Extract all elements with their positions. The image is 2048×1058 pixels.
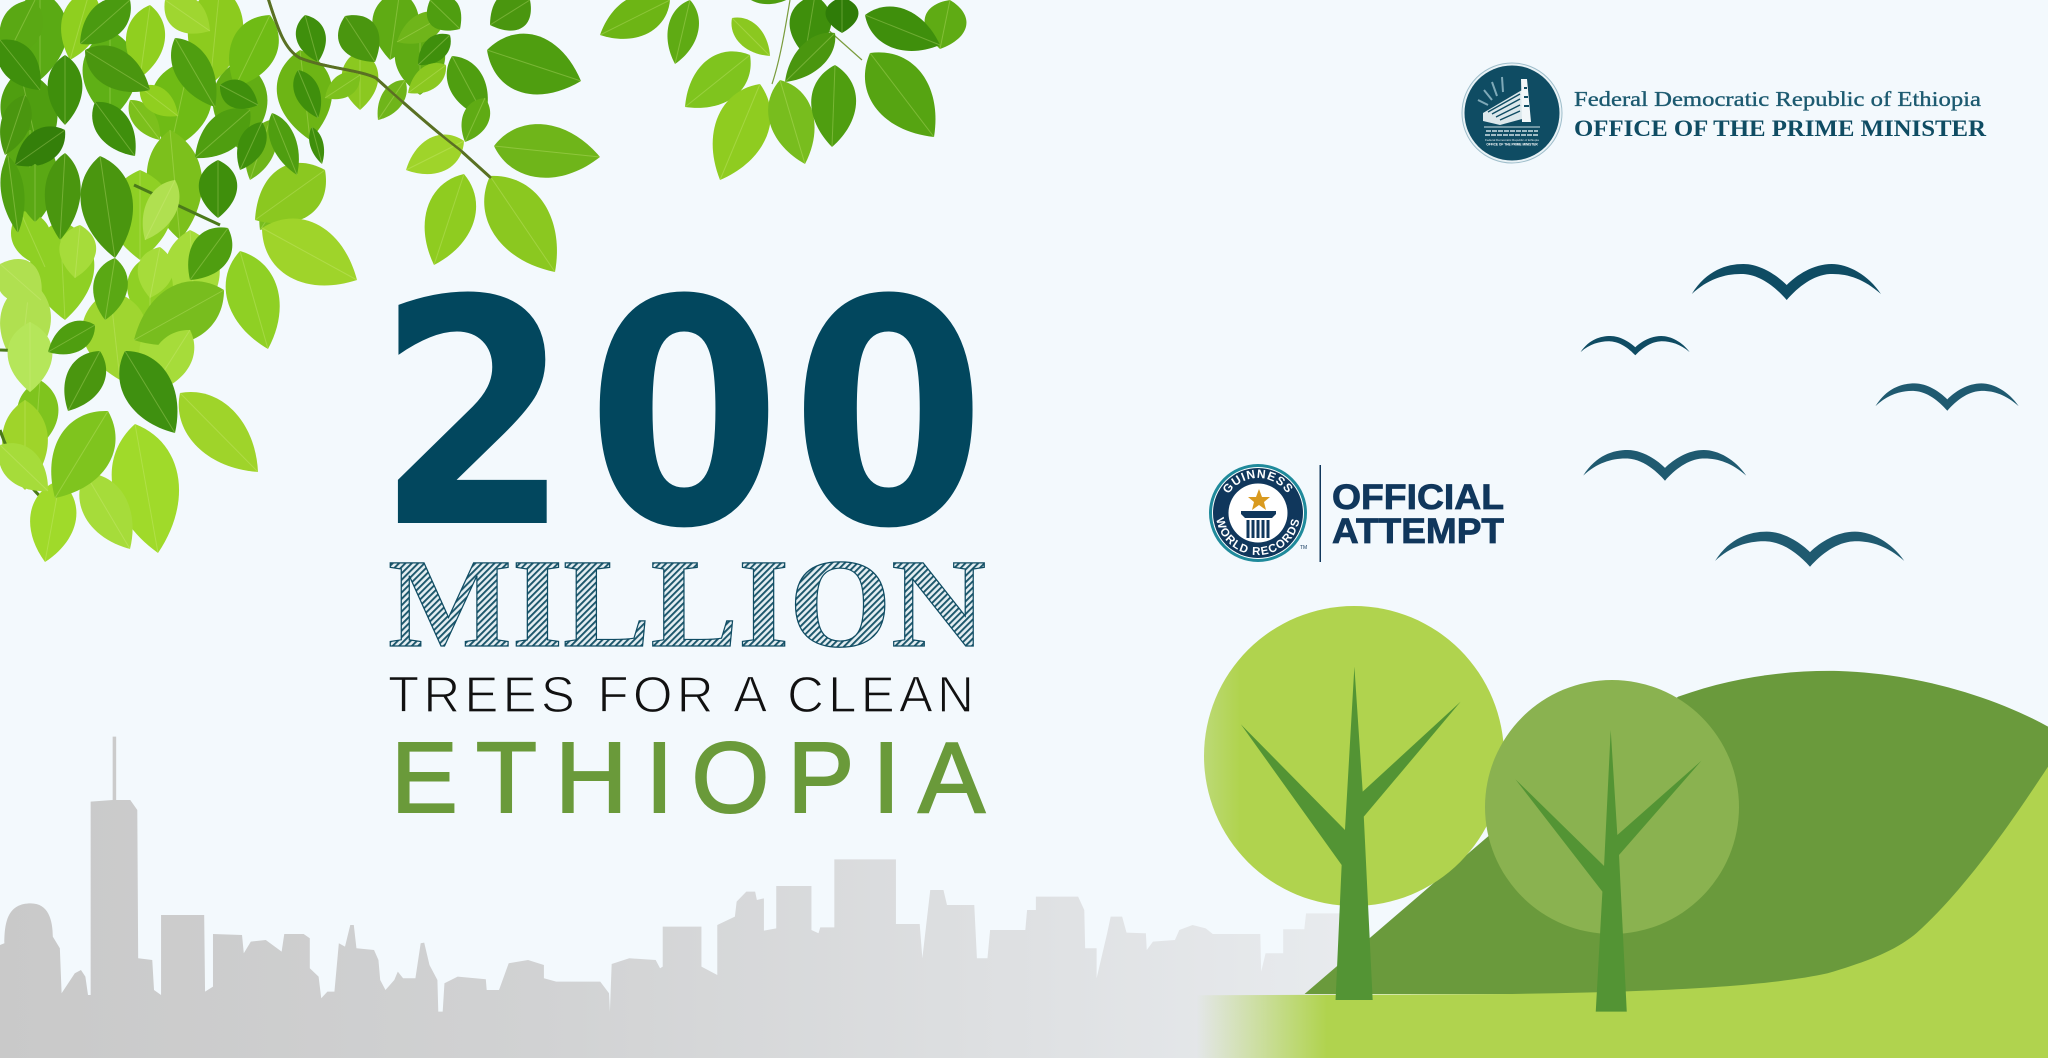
- logo: Guinness World Records badge: [1209, 464, 1307, 562]
- divider: [1320, 465, 1321, 562]
- logo: Office of the Prime Minister seal: [1462, 63, 1562, 163]
- text: Ethiopia: ETHIOPIA: [391, 722, 985, 834]
- logo: Office of the Prime Minister seal: OFFICE OF THE PRIME MINISTER: [1486, 142, 1538, 146]
- logo: Guinness World Records badge: GUINNESS: [1224, 470, 1292, 492]
- text: Office of the Prime Minister: OFFICE OF THE PRIME MINISTER: [1574, 116, 1986, 141]
- foliage: top-left branch: [0, 0, 603, 566]
- text: official attempt: ATTEMPT: [1332, 512, 1504, 551]
- city skyline silhouette: [0, 737, 1347, 1058]
- heading: 200: 200: [376, 233, 986, 597]
- logo: Guinness World Records badge: TM: [1300, 545, 1307, 551]
- logo: Guinness World Records badge: WORLD RECORDS: [1216, 516, 1299, 556]
- text: Federal Democratic Republic of Ethiopia: Federal Democratic Republic of Ethiopia: [1574, 87, 1982, 111]
- text: official attempt: OFFICIAL: [1332, 478, 1504, 517]
- foliage: top-centre branch: [591, 0, 971, 190]
- hill: [1305, 671, 2048, 995]
- birds: [1581, 264, 2019, 567]
- tree: left: [1204, 606, 1504, 1000]
- heading: MILLION: MILLION: [388, 534, 986, 674]
- text: official attempt: [1332, 478, 1504, 551]
- logo: Office of the Prime Minister seal: Federal Democratic Republic of Ethiopia: [1485, 138, 1539, 142]
- tree: right: [1485, 680, 1739, 1012]
- ground: [1197, 767, 2048, 1058]
- text: trees for a clean: TREES FOR A CLEAN: [388, 666, 974, 723]
